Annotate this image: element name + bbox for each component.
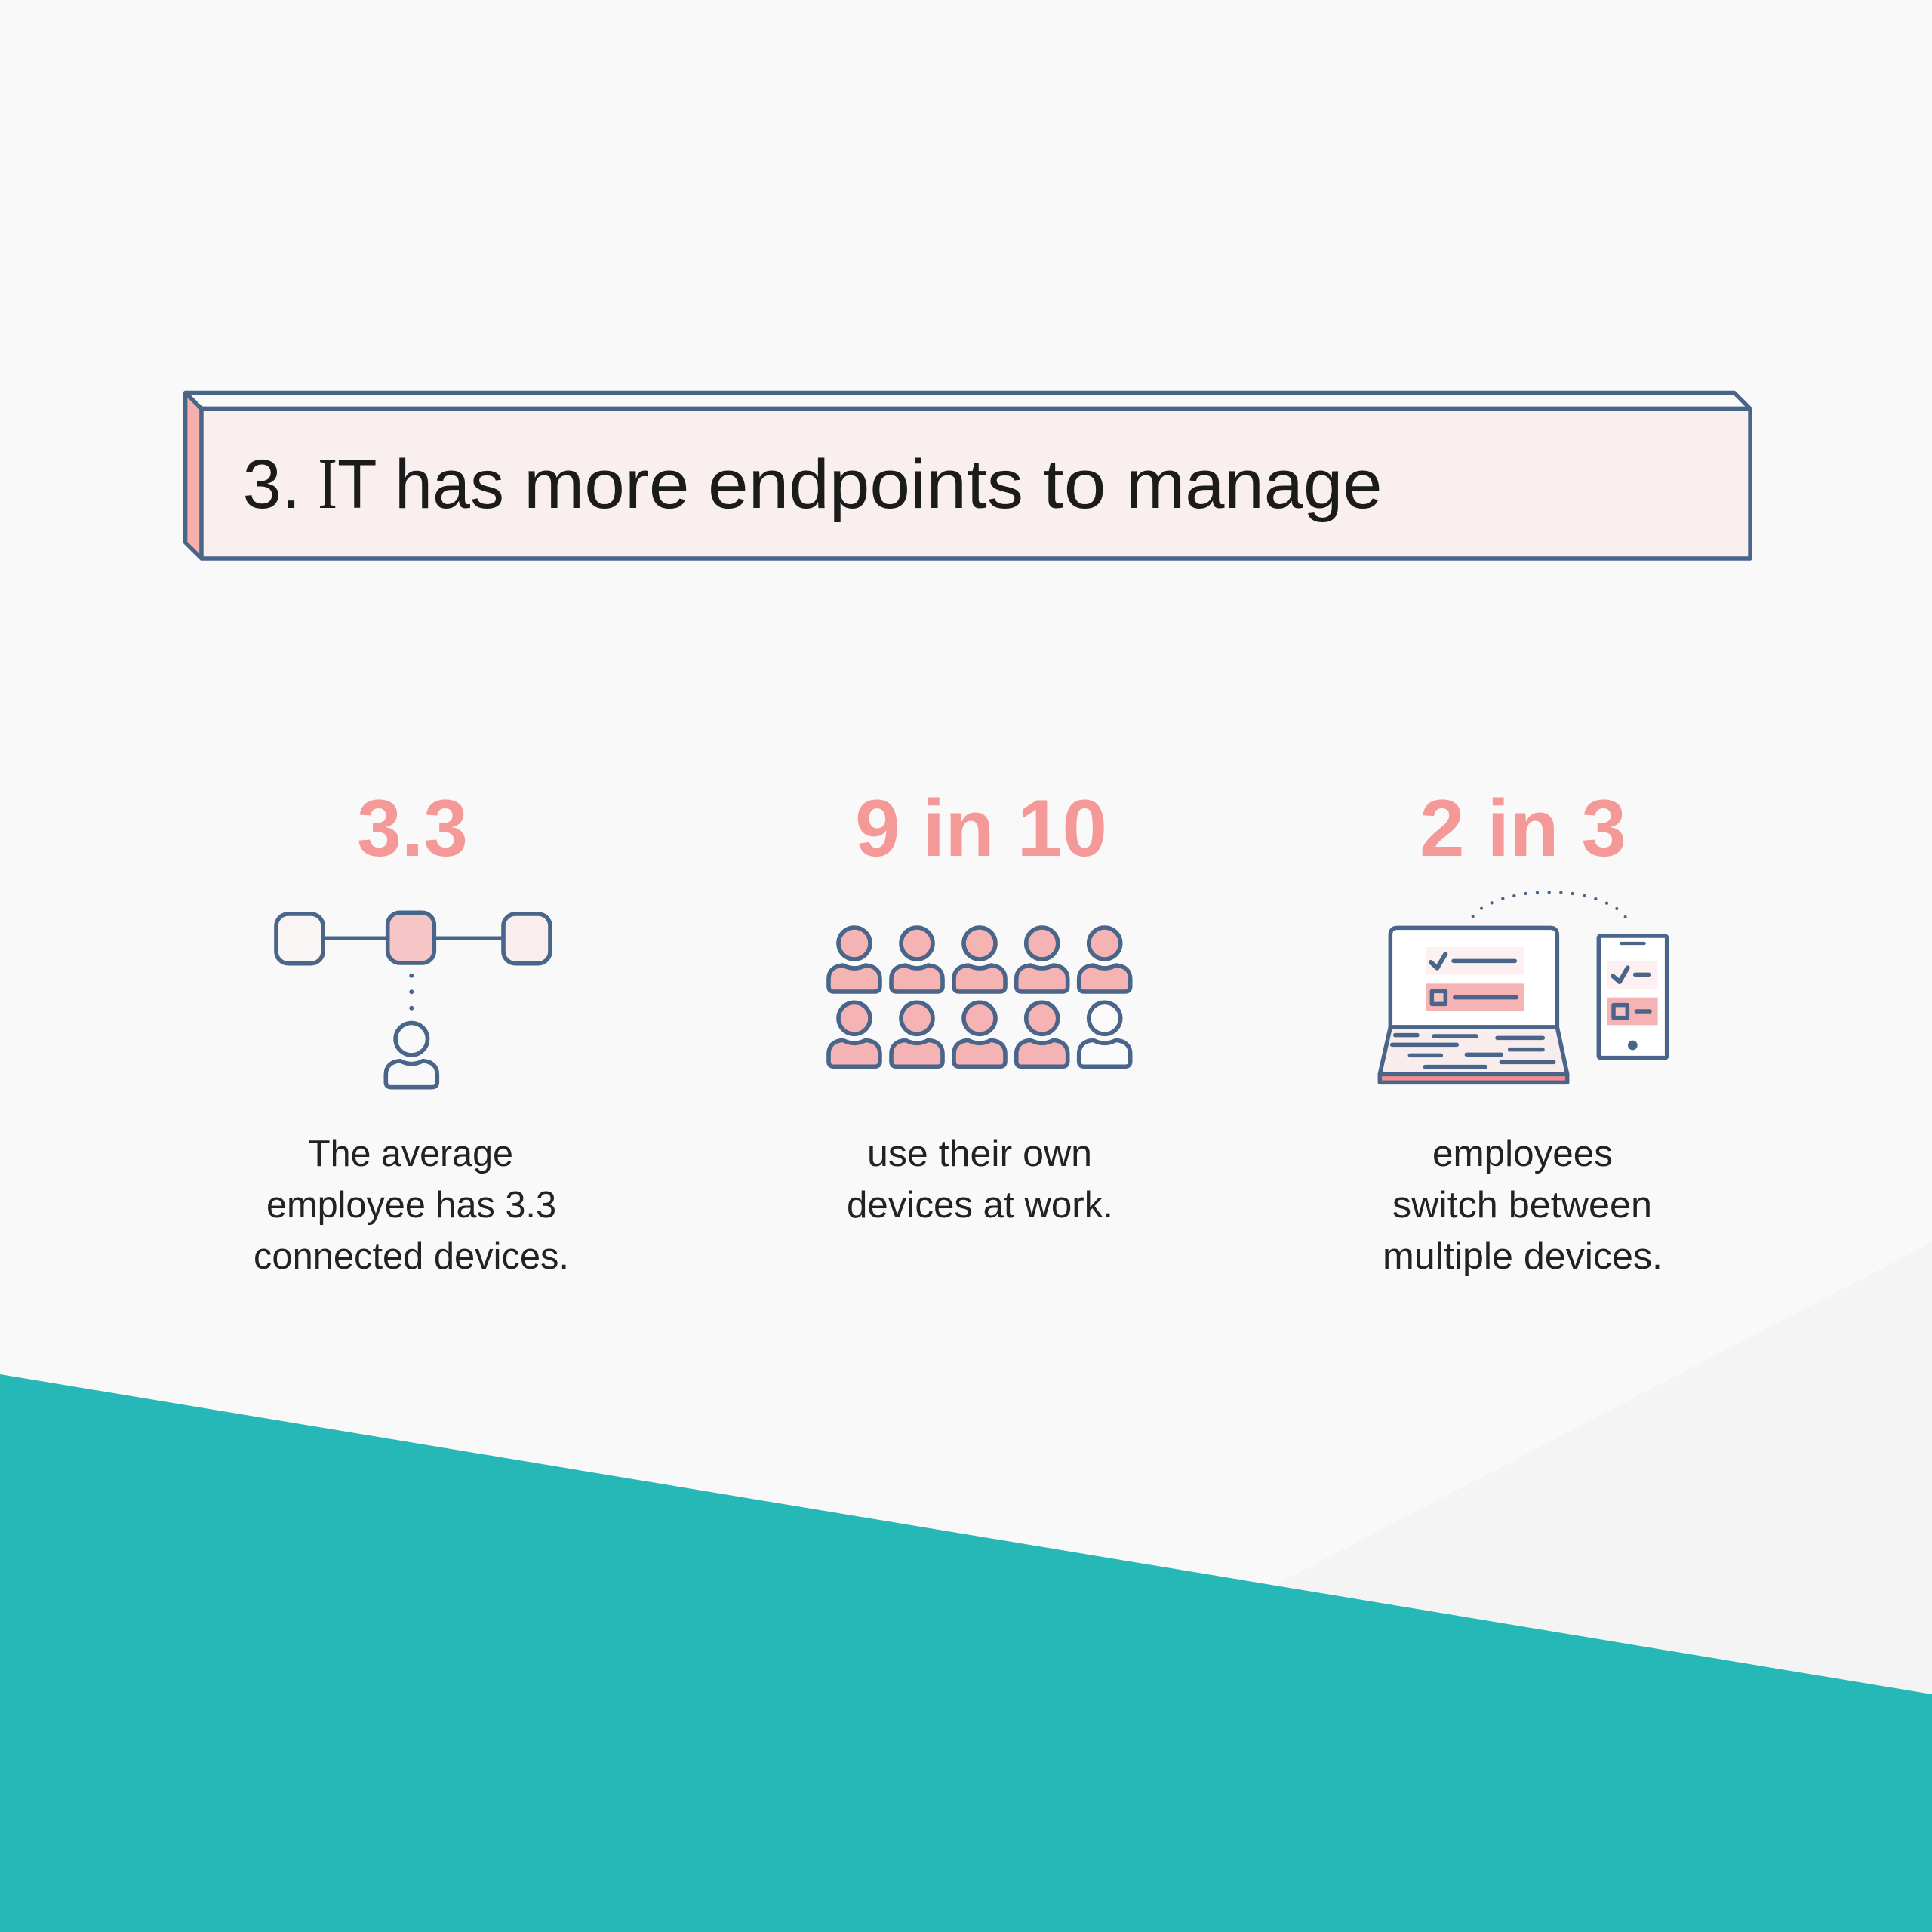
background: light grey wedge [1275,1242,1932,1694]
stat description: devices at work. [847,1185,1113,1226]
banner side face [186,392,202,558]
title [243,443,1383,524]
banner top face [186,392,1750,409]
stat number: 3.3 [357,783,468,873]
stat description: connected devices. [254,1236,569,1277]
icon: connected devices and person [276,912,550,1088]
icon: laptop and phone linked by dotted arc [1380,891,1667,1082]
banner front face [202,409,1750,558]
background: teal wedge [0,1374,1932,1932]
title: to [1043,446,1106,523]
stat description [847,1134,1113,1226]
icon: ten people, nine filled [829,928,1131,1066]
title: 3. [243,446,300,523]
stat description: switch between [1392,1185,1652,1226]
stat column: 9 in 10 [829,783,1131,1226]
title: has [395,446,504,523]
title: I [318,443,337,524]
stat column: 2 in 3 [1380,783,1667,1277]
title banner [186,392,1750,558]
stat column: 3.3 [254,783,569,1277]
stat number: 2 in 3 [1420,783,1626,873]
stat description [1383,1134,1663,1277]
stat description [254,1134,569,1277]
stat description: employee has 3.3 [266,1185,556,1226]
title: T [337,446,377,523]
title: manage [1126,446,1383,523]
stat description: use their own [867,1134,1092,1174]
stat number: 9 in 10 [855,783,1107,873]
title: endpoints [708,446,1023,523]
stat description: employees [1432,1134,1613,1174]
stat description: multiple devices. [1383,1236,1663,1277]
title: more [524,446,690,523]
stat description: The average [308,1134,513,1174]
